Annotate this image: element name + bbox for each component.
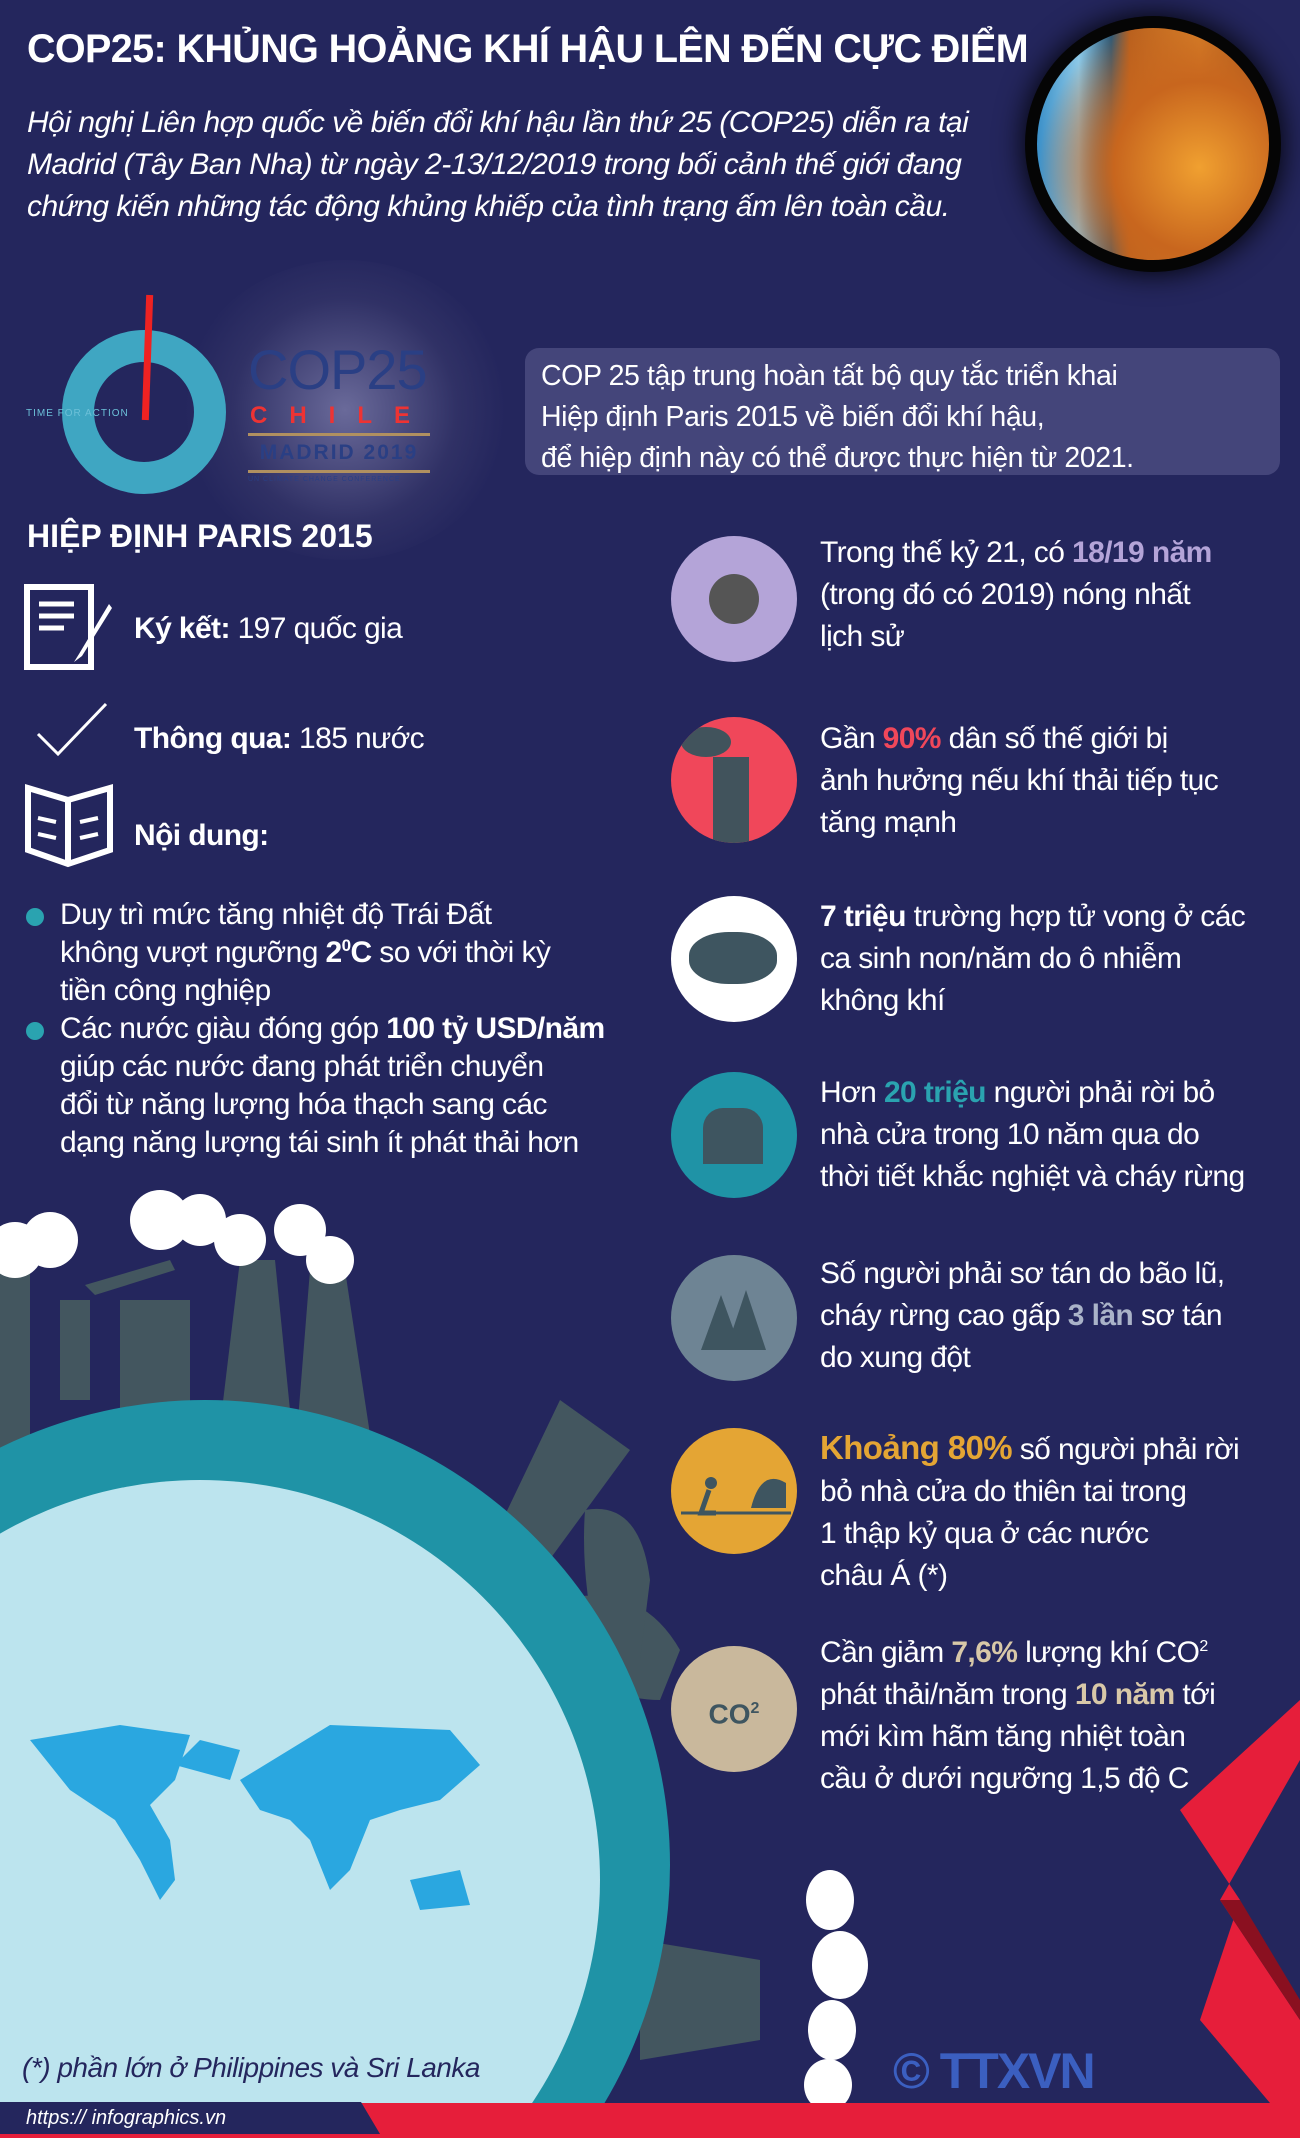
intro text: Hội nghị Liên hợp quốc về biến đổi khí hậu lần thứ 25 (COP25) diễn ra tại (27, 106, 968, 139)
item 2 text: tăng mạnh (820, 806, 956, 839)
item 4 text: thời tiết khắc nghiệt và cháy rừng (820, 1160, 1245, 1193)
item 4 text: Hơn 20 triệu người phải rời bỏ (820, 1076, 1215, 1109)
icon: check (37, 703, 107, 756)
item 6 text: châu Á (*) (820, 1559, 947, 1592)
item 6 text: Khoảng 80% số người phải rời (820, 1429, 1239, 1466)
logo: COP25 Chile (26, 294, 432, 494)
logo: COP25 Chile: UN CLIMATE CHANGE CONFERENCE (248, 476, 401, 483)
bullet list: không vượt ngưỡng 20C so với thời kỳ (60, 936, 550, 969)
item 4 circle: people (671, 1072, 797, 1198)
illustration: globe with factories (0, 1190, 868, 2103)
bullet list: đổi từ năng lượng hóa thạch sang các (60, 1088, 547, 1121)
icon: book (25, 784, 113, 868)
item 5 text: Số người phải sơ tán do bão lũ, (820, 1257, 1224, 1290)
item 4 text (820, 1076, 1245, 1193)
bullet list: dạng năng lượng tái sinh ít phát thải hơn (60, 1126, 579, 1159)
item 6 circle: disaster (671, 1428, 797, 1554)
logo: COP25 Chile: CHILE (250, 402, 432, 429)
bullet list: tiền công nghiệp (60, 974, 271, 1007)
bullet list (26, 898, 605, 1159)
logo ring (62, 330, 226, 494)
item 7 circle: CO2 (671, 1646, 797, 1772)
logo: TTXVN: © TTXVN (893, 2043, 1094, 2099)
callout box: COP 25 tập trung hoàn tất bộ quy tắc triển khai (541, 360, 1117, 392)
intro text (27, 106, 970, 223)
item 1 text: lịch sử (820, 620, 904, 653)
logo: COP25 Chile: TIME FOR ACTION (26, 408, 129, 419)
item 5 text (820, 1257, 1224, 1374)
footnote: (*) phần lớn ở Philippines và Sri Lanka (22, 2052, 480, 2083)
item 5 circle: forest fire (671, 1255, 797, 1381)
bullet list: Duy trì mức tăng nhiệt độ Trái Đất (60, 898, 492, 931)
item 4 text: nhà cửa trong 10 năm qua do (820, 1118, 1199, 1151)
item 7 circle: CO2: CO2 (709, 1698, 759, 1729)
bullet list: giúp các nước đang phát triển chuyển (60, 1050, 543, 1083)
item 1 circle: sun (671, 536, 797, 662)
title: COP25: KHỦNG HOẢNG KHÍ HẬU LÊN ĐẾN CỰC ĐIỂM (27, 27, 1028, 71)
item 5 text: cháy rừng cao gấp 3 lần sơ tán (820, 1299, 1222, 1332)
item 3 text: ca sinh non/năm do ô nhiễm (820, 942, 1181, 975)
callout box (525, 348, 1280, 475)
item 5 text: do xung đột (820, 1341, 970, 1374)
item 2 circle: factory (671, 717, 797, 843)
decoration: red ribbon (1180, 1700, 1300, 2103)
text: adopted: Thông qua: 185 nước (134, 722, 424, 755)
item 3 text (820, 900, 1245, 1017)
item 1 text: Trong thế kỷ 21, có 18/19 năm (820, 536, 1212, 569)
item 6 text: 1 thập kỷ qua ở các nước (820, 1517, 1149, 1550)
item 7 text (820, 1636, 1215, 1795)
footer bar (0, 2103, 1300, 2138)
item 3 text: 7 triệu trường hợp tử vong ở các (820, 900, 1245, 933)
item 7 text: Cần giảm 7,6% lượng khí CO2 (820, 1636, 1208, 1669)
text: content: Nội dung: (134, 819, 269, 852)
url (0, 2102, 380, 2134)
glow behind logo (180, 260, 510, 560)
callout box: để hiệp định này có thể được thực hiện từ 2021. (541, 442, 1134, 474)
url: https:// infographics.vn (26, 2107, 226, 2129)
bullet list: Các nước giàu đóng góp 100 tỷ USD/năm (60, 1012, 605, 1045)
icon: document (24, 584, 112, 670)
callout box: Hiệp định Paris 2015 về biến đổi khí hậu, (541, 401, 1044, 433)
item 2 text (820, 722, 1218, 839)
icon: earth half burning (1025, 16, 1281, 272)
heading: Paris: HIỆP ĐỊNH PARIS 2015 (27, 518, 373, 554)
item 7 text: cầu ở dưới ngưỡng 1,5 độ C (820, 1762, 1189, 1795)
item 2 text: ảnh hưởng nếu khí thải tiếp tục (820, 764, 1218, 797)
item 1 text: (trong đó có 2019) nóng nhất (820, 578, 1190, 611)
item 7 text: phát thải/năm trong 10 năm tới (820, 1678, 1215, 1711)
item 1 text (820, 536, 1212, 653)
item 3 circle: smog (671, 896, 797, 1022)
item 3 text: không khí (820, 984, 945, 1017)
intro text: Madrid (Tây Ban Nha) từ ngày 2-13/12/2019 trong bối cảnh thế giới đang (27, 148, 961, 181)
item 6 text: bỏ nhà cửa do thiên tai trong (820, 1475, 1186, 1508)
text: signed: Ký kết: 197 quốc gia (134, 612, 402, 645)
logo: COP25 Chile: MADRID 2019 (260, 441, 418, 464)
item 7 text: mới kìm hãm tăng nhiệt toàn (820, 1720, 1185, 1753)
logo: COP25 Chile: COP25 (248, 338, 427, 401)
item 2 text: Gần 90% dân số thế giới bị (820, 722, 1168, 755)
item 6 text (820, 1429, 1239, 1592)
intro text: chứng kiến những tác động khủng khiếp của tình trạng ấm lên toàn cầu. (27, 190, 950, 223)
